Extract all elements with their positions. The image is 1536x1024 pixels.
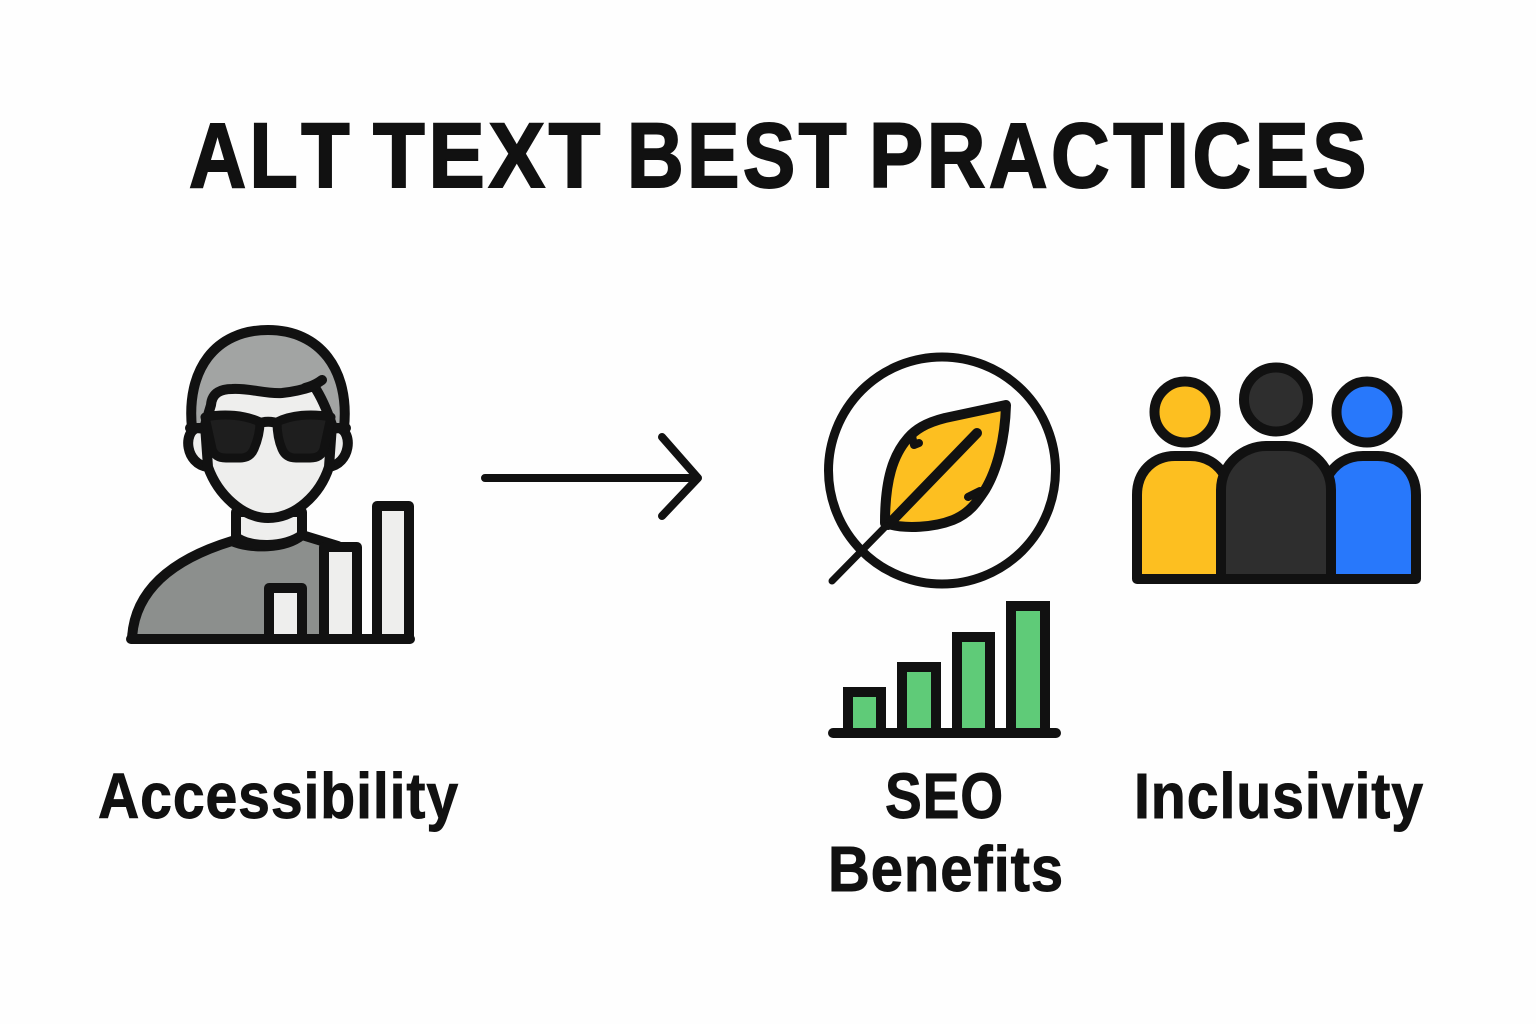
- centre head: [1244, 368, 1308, 432]
- left head: [1154, 382, 1216, 442]
- bar 3: [377, 506, 409, 639]
- bar 2: [324, 547, 357, 639]
- title: [189, 105, 1370, 207]
- hair flick: [305, 380, 322, 388]
- ears: [188, 428, 348, 467]
- person body: [132, 535, 338, 639]
- right person: [1327, 456, 1416, 579]
- bar 1: [269, 588, 302, 639]
- label: accessibility: Accessibility: [98, 760, 459, 832]
- bar 1: [848, 692, 881, 733]
- title: TEXT: [373, 105, 604, 207]
- leaf notches: [912, 436, 980, 497]
- neck: [236, 512, 302, 545]
- bar 4: [1011, 606, 1045, 733]
- panel: SEO benefits: [828, 357, 1064, 905]
- arrow: [485, 437, 698, 516]
- lenses: [205, 415, 331, 458]
- label: inclusivity: Inclusivity: [1134, 760, 1424, 832]
- title: BEST: [627, 105, 850, 207]
- circle: [828, 357, 1056, 584]
- leaf stem: [888, 433, 977, 525]
- centre person: [1221, 446, 1331, 579]
- panel: accessibility: [98, 330, 459, 832]
- sunglasses: [190, 422, 346, 428]
- icon: person with sunglasses and bars: [131, 330, 410, 639]
- panel: inclusivity: [1134, 368, 1424, 832]
- label: Benefits: Benefits: [828, 833, 1064, 905]
- icon: leaf in circle: [828, 357, 1056, 584]
- baseline: [1137, 574, 1416, 584]
- baseline: [131, 634, 410, 644]
- bar 2: [902, 667, 936, 733]
- label: SEO: SEO: [885, 760, 1004, 832]
- title: PRACTICES: [869, 105, 1370, 207]
- chart: growth bars: [833, 606, 1056, 733]
- right head: [1336, 382, 1398, 442]
- leaf: [885, 405, 1006, 527]
- face: [205, 386, 332, 518]
- title: ALT: [189, 105, 353, 207]
- icon: three people: [1137, 368, 1416, 579]
- bar 3: [957, 637, 990, 733]
- stem tail: [832, 526, 886, 581]
- hair: [191, 330, 345, 428]
- baseline: [833, 728, 1056, 738]
- left person: [1137, 456, 1226, 579]
